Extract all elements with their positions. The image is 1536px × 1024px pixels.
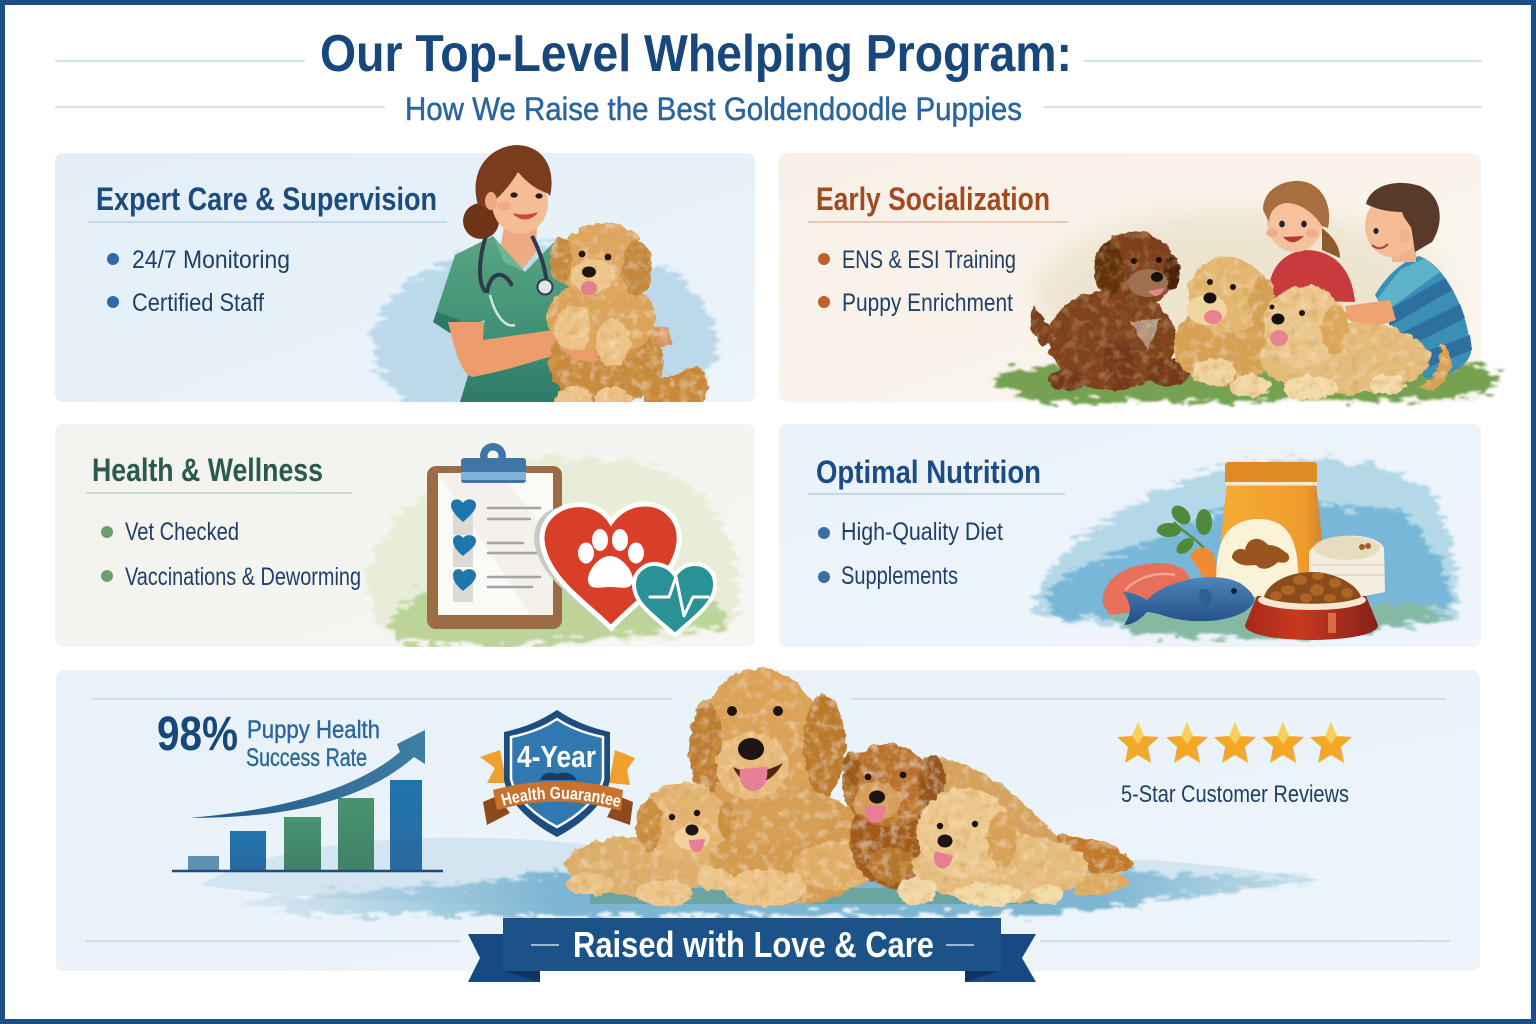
bullet list (107, 246, 290, 317)
illustration: boy (1345, 183, 1472, 378)
icon: food bag (1215, 462, 1328, 597)
title block (320, 25, 1072, 127)
illustration: golden puppy sitting (1173, 257, 1277, 386)
icon: clipboard checklist (427, 443, 562, 629)
caption: customer reviews: 5-Star Customer Reviews (1121, 781, 1349, 808)
panel: expert care and supervision (55, 145, 755, 413)
heading: Expert Care & Supervision (96, 181, 437, 217)
illustration: brown puppy (1030, 232, 1190, 391)
statistic: 98% puppy health (157, 708, 380, 772)
illustration: golden puppy held by nurse (547, 223, 708, 413)
heading: Optimal Nutrition (816, 454, 1041, 490)
badge: 4-year health guarantee: Health Guarantee (501, 786, 620, 807)
banner: raised with love and care: Raised with Love & Care (573, 924, 934, 965)
icon: red kibble bowl (1245, 572, 1378, 640)
badge: 4-year health guarantee (480, 710, 635, 837)
illustration: nurse (433, 145, 600, 402)
illustration: pale puppy right (897, 788, 1130, 906)
statistic: 98% puppy health: Success Rate (246, 744, 367, 772)
panel: health and wellness (55, 424, 755, 647)
bullet list (818, 518, 1003, 590)
bullet list (101, 518, 361, 591)
icon: red heart with paw (534, 504, 679, 628)
heading: Health & Wellness (92, 452, 323, 488)
heading: Early Socialization (816, 181, 1050, 217)
main title: Our Top-Level Whelping Program: (320, 25, 1072, 83)
statistic: 98% puppy health: 98% (157, 708, 238, 761)
bullet list: ENS & ESI Training (842, 246, 1016, 274)
icon: salmon fillet (1103, 563, 1189, 615)
panel: early socialization (779, 153, 1504, 402)
bar chart with rising arrow (172, 730, 443, 871)
icon: supplement tub (1309, 536, 1385, 600)
illustration: girl (1263, 181, 1355, 302)
bullet list: Vet Checked (125, 518, 239, 546)
bullet list: 24/7 Monitoring (132, 246, 290, 274)
panel: optimal nutrition (779, 424, 1481, 647)
icon: teal heart with pulse (634, 564, 715, 635)
illustration: adult goldendoodle (689, 668, 1133, 907)
bullet list: High-Quality Diet (841, 518, 1003, 546)
bullet list: Puppy Enrichment (842, 289, 1013, 317)
icon: carrot and parsley (1157, 502, 1222, 585)
badge: 4-year health guarantee: 4-Year (517, 739, 596, 774)
rating: five stars (1117, 722, 1352, 763)
statistic: 98% puppy health: Puppy Health (247, 716, 380, 744)
bullet list: Vaccinations & Deworming (125, 563, 361, 591)
subtitle: How We Raise the Best Goldendoodle Puppies (405, 91, 1022, 127)
illustration: golden puppy lying (1230, 286, 1451, 400)
illustration: rust puppy (842, 744, 946, 888)
panel: bottom stats and family (56, 666, 1480, 971)
banner: raised with love and care (468, 918, 1036, 982)
bullet list: Supplements (841, 562, 958, 590)
icon: blue fish (1123, 577, 1254, 625)
bullet list: Certified Staff (132, 289, 264, 317)
bullet list (818, 246, 1016, 317)
illustration: small puppy left (566, 783, 734, 906)
